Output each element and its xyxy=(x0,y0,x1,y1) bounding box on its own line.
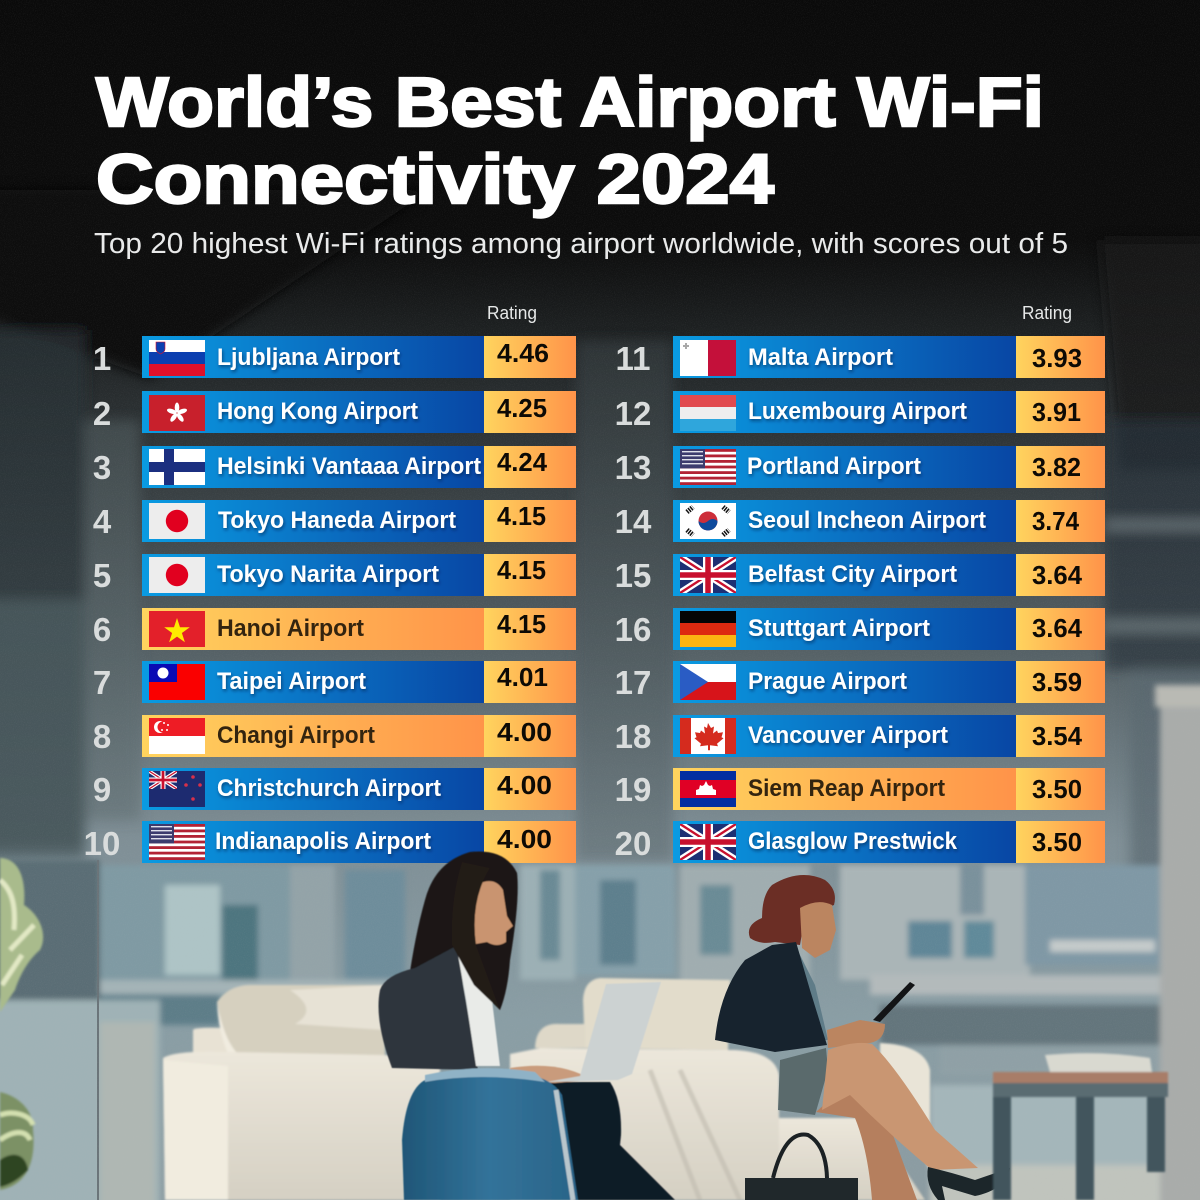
hands xyxy=(510,1066,592,1083)
row 7 xyxy=(93,661,576,703)
row 7: Taipei Airport xyxy=(217,668,366,695)
row 17: 17 xyxy=(615,664,651,701)
flag: UK xyxy=(680,557,736,593)
flag: New Zealand xyxy=(149,771,205,807)
row 12 xyxy=(615,391,1105,433)
row 16 xyxy=(615,608,1105,650)
row 15 xyxy=(615,554,1105,596)
row 4 xyxy=(93,500,576,542)
flag: Vietnam xyxy=(149,611,205,647)
row 17 xyxy=(615,661,1105,703)
row 10: 10 xyxy=(84,825,120,862)
armchair left xyxy=(163,985,440,1200)
flag: South Korea xyxy=(680,503,736,539)
row 13: 3.82 xyxy=(1032,452,1081,482)
side table xyxy=(993,1053,1168,1200)
title xyxy=(96,63,1044,218)
lower leg xyxy=(816,1082,917,1200)
row 6: Hanoi Airport xyxy=(217,615,364,642)
laptop xyxy=(546,982,661,1082)
woman with tablet xyxy=(715,875,1010,1200)
title: Connectivity 2024 xyxy=(96,140,774,218)
upper leg xyxy=(822,1043,978,1170)
row 5: 5 xyxy=(93,557,111,594)
row 10: Indianapolis Airport xyxy=(215,828,431,855)
flag: Slovenia xyxy=(149,340,205,376)
row 12: 12 xyxy=(615,395,651,432)
face xyxy=(470,881,513,945)
row 1: Ljubljana Airport xyxy=(217,344,400,371)
row 9: 9 xyxy=(93,771,111,808)
row 8: 4.00 xyxy=(497,717,552,747)
row 3: 4.24 xyxy=(497,447,548,477)
row 11 xyxy=(616,336,1105,378)
row 7: 4.01 xyxy=(497,662,548,692)
blazer xyxy=(378,945,478,1070)
right column ranking xyxy=(615,336,1105,863)
row 3 xyxy=(93,446,576,488)
trousers xyxy=(545,1082,675,1200)
row 17: 3.59 xyxy=(1032,667,1082,697)
row 6: 4.15 xyxy=(497,609,546,639)
row 9: Christchurch Airport xyxy=(217,775,441,802)
row 18: 18 xyxy=(615,718,651,755)
row 13: Portland Airport xyxy=(747,453,921,480)
row 11: Malta Airport xyxy=(748,344,893,371)
row 8: 8 xyxy=(93,718,111,755)
row 8: Changi Airport xyxy=(217,722,375,749)
row 16: 16 xyxy=(615,611,651,648)
flag: USA xyxy=(149,824,205,860)
row 14 xyxy=(615,500,1105,542)
blazer xyxy=(715,942,827,1052)
left column ranking xyxy=(84,336,576,863)
row 13 xyxy=(615,446,1105,488)
row 4: 4.15 xyxy=(497,501,546,531)
row 19: 19 xyxy=(615,771,651,808)
armchair right xyxy=(510,978,930,1200)
row 17: Prague Airport xyxy=(748,668,907,695)
row 1: 1 xyxy=(93,340,111,377)
hair back xyxy=(408,851,518,1010)
row 15: 15 xyxy=(615,557,651,594)
row 14: 3.74 xyxy=(1032,506,1079,536)
suitcase xyxy=(402,1072,578,1200)
row 3: Helsinki Vantaaa Airport xyxy=(217,453,481,480)
row 19: 3.50 xyxy=(1032,774,1082,804)
row 16: Stuttgart Airport xyxy=(748,615,930,642)
hair xyxy=(749,875,835,945)
row 4: Tokyo Haneda Airport xyxy=(218,507,456,534)
hair front xyxy=(452,862,500,1010)
shirt xyxy=(458,950,500,1066)
row 18 xyxy=(615,715,1105,757)
row 3: 3 xyxy=(93,449,111,486)
flag: Germany xyxy=(680,611,736,647)
row 18: 3.54 xyxy=(1032,721,1083,751)
shoe xyxy=(927,1167,1010,1200)
top xyxy=(795,945,828,1040)
row 6: 6 xyxy=(93,611,111,648)
subtitle: Top 20 highest Wi-Fi ratings among airport worldwide, with scores out of 5 xyxy=(94,228,1068,260)
row 19: Siem Reap Airport xyxy=(748,775,945,802)
row 11: 3.93 xyxy=(1032,343,1082,373)
row 4: 4 xyxy=(93,503,112,540)
row 1: 4.46 xyxy=(497,338,549,368)
flag: Hong Kong xyxy=(149,395,205,431)
title: World’s Best Airport Wi-Fi xyxy=(96,63,1044,141)
flag: Singapore xyxy=(149,718,205,754)
flag: USA xyxy=(680,449,736,485)
row 5: 4.15 xyxy=(497,555,546,585)
row 2: 2 xyxy=(93,395,111,432)
plant left xyxy=(0,858,43,1190)
row 11: 11 xyxy=(616,340,650,377)
row 8 xyxy=(93,715,576,757)
row 14: Seoul Incheon Airport xyxy=(748,507,986,534)
skirt xyxy=(778,1048,828,1115)
row 18: Vancouver Airport xyxy=(748,722,948,749)
row 2: 4.25 xyxy=(497,393,547,423)
tablet xyxy=(873,982,915,1022)
row 19 xyxy=(615,768,1105,810)
row 12: Luxembourg Airport xyxy=(748,398,967,425)
row 2: Hong Kong Airport xyxy=(217,398,418,425)
row 1 xyxy=(93,336,576,378)
column header: rating left: Rating xyxy=(487,303,537,323)
row 2 xyxy=(93,391,576,433)
flag: Cambodia xyxy=(680,771,736,807)
row 20 xyxy=(615,821,1105,863)
row 13: 13 xyxy=(615,449,651,486)
row 6 xyxy=(93,608,576,650)
row 14: 14 xyxy=(615,503,652,540)
forearm and hand xyxy=(827,1020,885,1048)
flag: Czechia xyxy=(680,664,736,700)
row 20: 20 xyxy=(615,825,651,862)
row 15: 3.64 xyxy=(1032,560,1083,590)
row 5 xyxy=(93,554,576,596)
row 16: 3.64 xyxy=(1032,613,1083,643)
flag: Taiwan xyxy=(149,664,205,700)
handbag xyxy=(745,1135,858,1200)
row 20: 3.50 xyxy=(1032,827,1082,857)
row 5: Tokyo Narita Airport xyxy=(217,561,439,588)
flag: Malta xyxy=(680,340,736,376)
flag: Luxembourg xyxy=(680,395,736,431)
row 10: 4.00 xyxy=(497,824,552,854)
face xyxy=(800,902,836,958)
row 9 xyxy=(93,768,576,810)
row 7: 7 xyxy=(93,664,111,701)
flag: Finland xyxy=(149,449,205,485)
row 9: 4.00 xyxy=(497,770,552,800)
row 15: Belfast City Airport xyxy=(748,561,957,588)
row 20: Glasglow Prestwick xyxy=(748,828,958,855)
row 12: 3.91 xyxy=(1032,397,1081,427)
column header: rating right: Rating xyxy=(1022,303,1072,323)
flag: Canada xyxy=(680,718,736,754)
flag: Japan xyxy=(149,557,205,593)
row 10 xyxy=(84,821,576,863)
flag: Japan xyxy=(149,503,205,539)
flag: UK xyxy=(680,824,736,860)
woman with laptop xyxy=(378,851,675,1200)
